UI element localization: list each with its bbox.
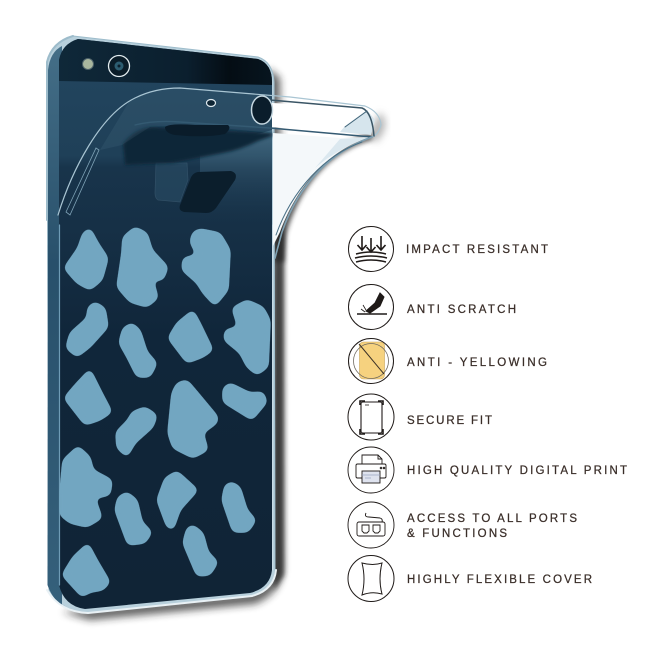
phone with clear case	[47, 36, 385, 620]
phone side strip	[48, 46, 62, 606]
drop shadow	[62, 68, 283, 620]
label: & FUNCTIONS	[407, 528, 507, 540]
fingerprint cutout	[180, 171, 236, 213]
label: IMPACT RESISTANT	[406, 244, 548, 256]
label: ACCESS TO ALL PORTS	[407, 513, 577, 525]
case edges	[47, 36, 381, 613]
lens flash	[82, 58, 94, 70]
label: ANTI SCRATCH	[407, 304, 516, 316]
lip holes	[165, 96, 272, 136]
camera	[108, 56, 130, 76]
feature: flexible cover	[348, 556, 592, 602]
case lip	[100, 88, 375, 246]
icon: yellow case crossed	[348, 338, 394, 384]
feature: impact resistant	[348, 226, 548, 272]
white lip opening	[272, 103, 365, 130]
case outer edge	[47, 36, 275, 613]
phone back	[59, 39, 272, 609]
feature: secure fit	[348, 394, 492, 440]
feature: anti scratch	[348, 284, 516, 330]
icon: flexible cover	[348, 556, 394, 602]
camera band	[59, 39, 272, 85]
feature: anti yellowing	[348, 338, 547, 384]
icon: printer	[348, 447, 394, 493]
cow print spots	[60, 227, 270, 597]
feature: digital print	[348, 447, 627, 493]
label: HIGH QUALITY DIGITAL PRINT	[407, 465, 627, 477]
case flap inner shade	[123, 127, 272, 165]
icon: phone case corners	[348, 394, 394, 440]
label: SECURE FIT	[407, 415, 492, 427]
icon: blade scratching surface	[348, 284, 394, 330]
icon: impact arrows	[348, 226, 394, 272]
label: ANTI - YELLOWING	[407, 357, 547, 369]
feature: access to ports	[348, 502, 582, 548]
icon: ports	[348, 502, 394, 548]
light reflection	[200, 130, 272, 225]
label: HIGHLY FLEXIBLE COVER	[407, 574, 592, 586]
fingerprint square	[155, 163, 188, 202]
